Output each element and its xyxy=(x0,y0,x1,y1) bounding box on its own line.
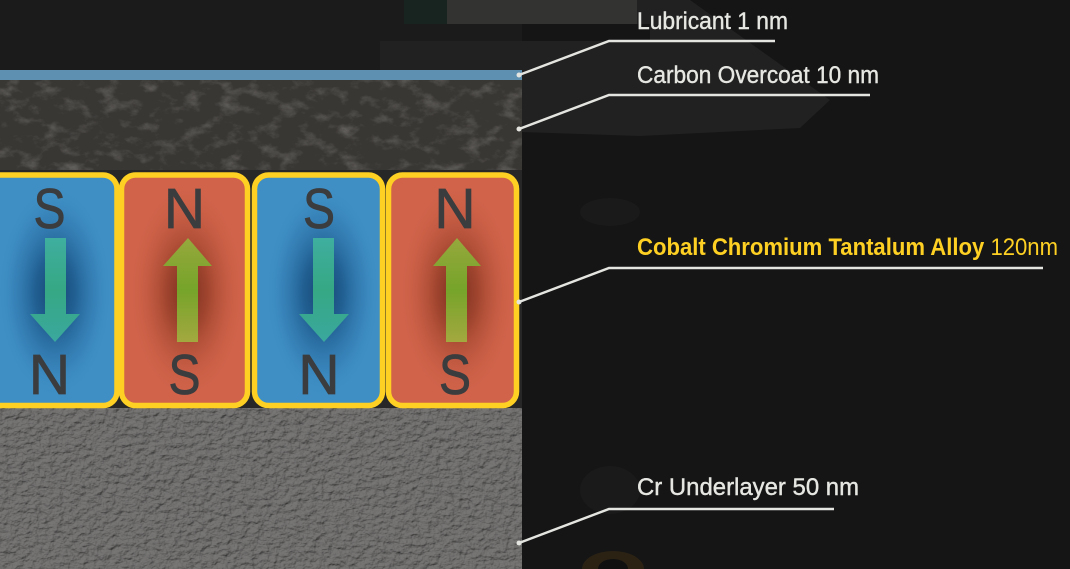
letter S: S xyxy=(34,177,66,241)
arrow: pointing up xyxy=(163,238,212,342)
callout: lubricant: Lubricant 1 nm xyxy=(637,8,788,35)
magnet 1: south up xyxy=(0,175,117,407)
callout: lubricant xyxy=(516,8,788,78)
letter S: S xyxy=(168,343,200,407)
layer: cobalt chromium tantalum alloy backing xyxy=(0,170,522,408)
letter S: S xyxy=(439,343,471,407)
arrow: pointing up xyxy=(433,238,481,342)
magnet 2: north up xyxy=(122,175,248,407)
letter N: N xyxy=(29,343,70,407)
letter N: N xyxy=(164,177,205,241)
callout: chromium underlayer xyxy=(516,474,859,546)
arrow: pointing down xyxy=(299,238,349,342)
layer: carbon overcoat xyxy=(0,80,522,172)
magnet 3: south up xyxy=(254,175,382,407)
letter N: N xyxy=(434,177,476,241)
callout: carbon overcoat xyxy=(516,62,879,132)
callout: carbon overcoat: Carbon Overcoat 10 nm xyxy=(637,62,879,89)
callout: cobalt chromium tantalum alloy: Cobalt Chromium Tantalum Alloy 120nm xyxy=(637,234,1058,261)
magnet 4: north up xyxy=(388,175,516,407)
callout: cobalt chromium tantalum alloy xyxy=(516,234,1058,304)
letter S: S xyxy=(303,177,335,241)
layer: lubricant xyxy=(0,70,522,80)
letter N: N xyxy=(298,343,340,407)
arrow: pointing down xyxy=(30,238,80,342)
callout: chromium underlayer: Cr Underlayer 50 nm xyxy=(637,474,859,501)
layer: chromium underlayer xyxy=(0,406,522,569)
